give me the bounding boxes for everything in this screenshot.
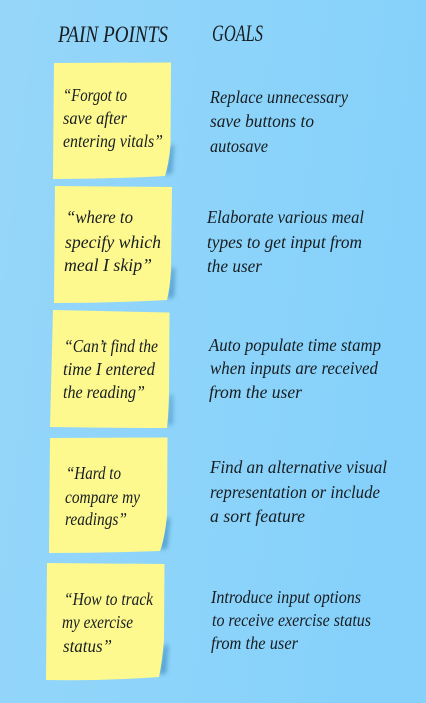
goal 5 text: to receive exercise status xyxy=(212,610,371,630)
goal 4 text: a sort feature xyxy=(210,506,305,526)
goal 2 text: the user xyxy=(207,256,263,276)
goal 1 text: Replace unnecessary xyxy=(209,87,348,107)
goal 1 text xyxy=(209,87,348,156)
note 5 text xyxy=(62,589,154,656)
heading: pain points: PAIN POINTS xyxy=(57,22,168,47)
goal 1 text: autosave xyxy=(210,136,268,156)
goal 2 text xyxy=(206,207,364,276)
goal 3 text: from the user xyxy=(209,382,303,402)
note 1 text: “Forgot to xyxy=(63,85,127,105)
goal 5 text: Introduce input options xyxy=(210,587,361,607)
goal 3 text: when inputs are received xyxy=(210,358,379,378)
note 3 text: the reading” xyxy=(63,382,145,402)
note 4 text: readings” xyxy=(65,509,127,529)
note 1 text xyxy=(63,85,163,151)
note 1 text: save after xyxy=(63,108,128,128)
sticky note 2 xyxy=(54,186,175,303)
goal 5 text: from the user xyxy=(211,633,299,653)
heading: goals: GOALS xyxy=(212,21,263,46)
note 1 text: entering vitals” xyxy=(63,131,163,151)
note 2 text xyxy=(64,207,161,275)
goal 2 text: types to get input from xyxy=(207,232,362,252)
goal 4 text: Find an alternative visual xyxy=(209,457,387,477)
note 4 text: compare my xyxy=(65,487,140,507)
sticky note 5 xyxy=(46,563,168,680)
note 3 text xyxy=(63,336,158,402)
note 5 text: my exercise xyxy=(62,612,133,632)
goal 3 text xyxy=(208,335,381,402)
note 2 text: “where to xyxy=(66,207,133,227)
note 5 text: status” xyxy=(63,636,112,656)
sticky note 1 xyxy=(53,62,174,179)
sticky note 3 xyxy=(50,310,173,428)
note 4 text xyxy=(65,463,140,529)
goal 5 text xyxy=(210,587,371,653)
goal 1 text: save buttons to xyxy=(210,111,314,131)
note 4 text: “Hard to xyxy=(66,463,121,483)
note 5 text: “How to track xyxy=(64,589,154,609)
goal 2 text: Elaborate various meal xyxy=(206,207,364,227)
note 3 text: time I entered xyxy=(63,359,156,379)
sticky note 4 xyxy=(49,438,170,553)
goal 3 text: Auto populate time stamp xyxy=(208,335,381,355)
note 2 text: specify which xyxy=(65,232,161,252)
note 3 text: “Can’t find the xyxy=(64,336,158,356)
note 2 text: meal I skip” xyxy=(64,255,152,275)
goal 4 text xyxy=(209,457,387,526)
goal 4 text: representation or include xyxy=(210,482,380,502)
